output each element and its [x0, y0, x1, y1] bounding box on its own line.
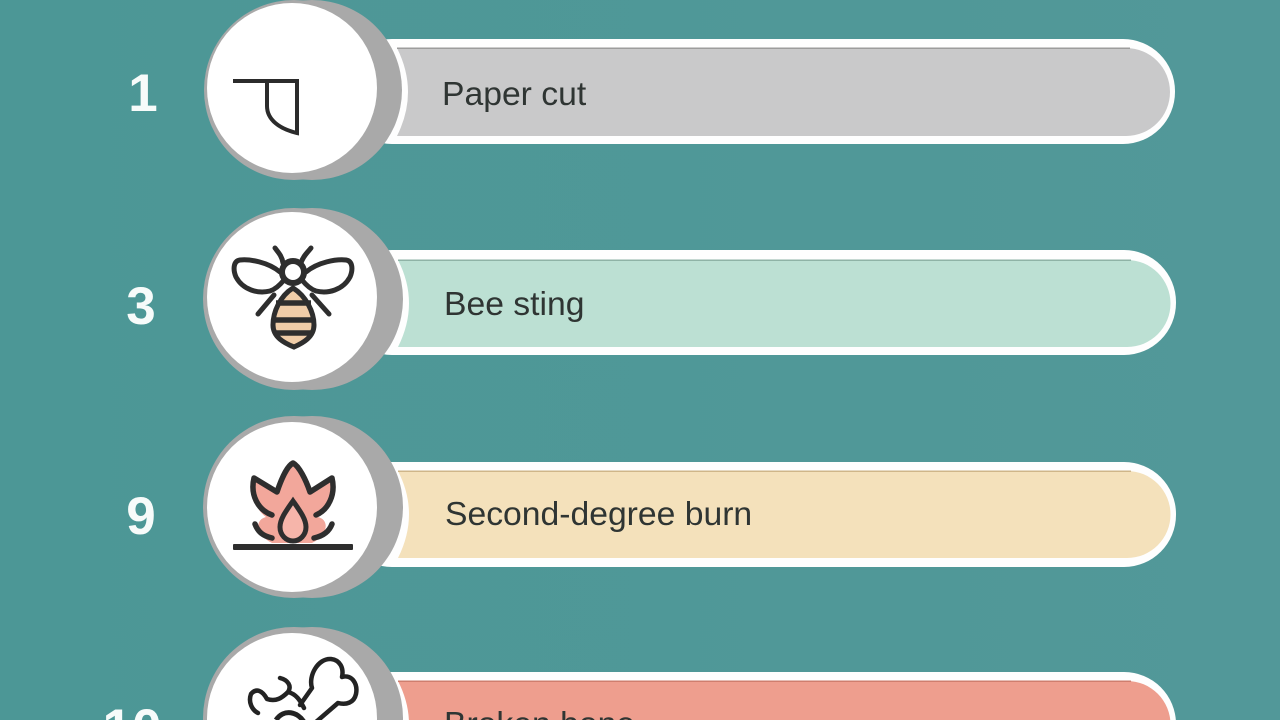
icon badge: bee [203, 208, 403, 390]
icon badge: paper cut [204, 0, 402, 180]
row: paper cut, level 1 [128, 0, 1175, 180]
row: bee sting, level 3 [126, 208, 1176, 390]
label: bee sting: Bee sting [444, 285, 584, 323]
label: second-degree burn: Second-degree burn [445, 495, 752, 533]
icon badge: flame [203, 416, 403, 598]
row: second-degree burn, level 9 [126, 416, 1176, 598]
label: paper cut: Paper cut [442, 75, 587, 113]
number 3: 3 [126, 277, 156, 336]
bar: broken bone [340, 672, 1176, 720]
number 1: 1 [128, 64, 158, 123]
bar: second-degree burn [340, 462, 1176, 567]
row: broken bone, level 10 [103, 627, 1176, 720]
bar: paper cut [340, 39, 1175, 144]
bar: bee sting [340, 250, 1176, 355]
number 9: 9 [126, 487, 156, 546]
icon badge: broken bone [203, 627, 403, 720]
